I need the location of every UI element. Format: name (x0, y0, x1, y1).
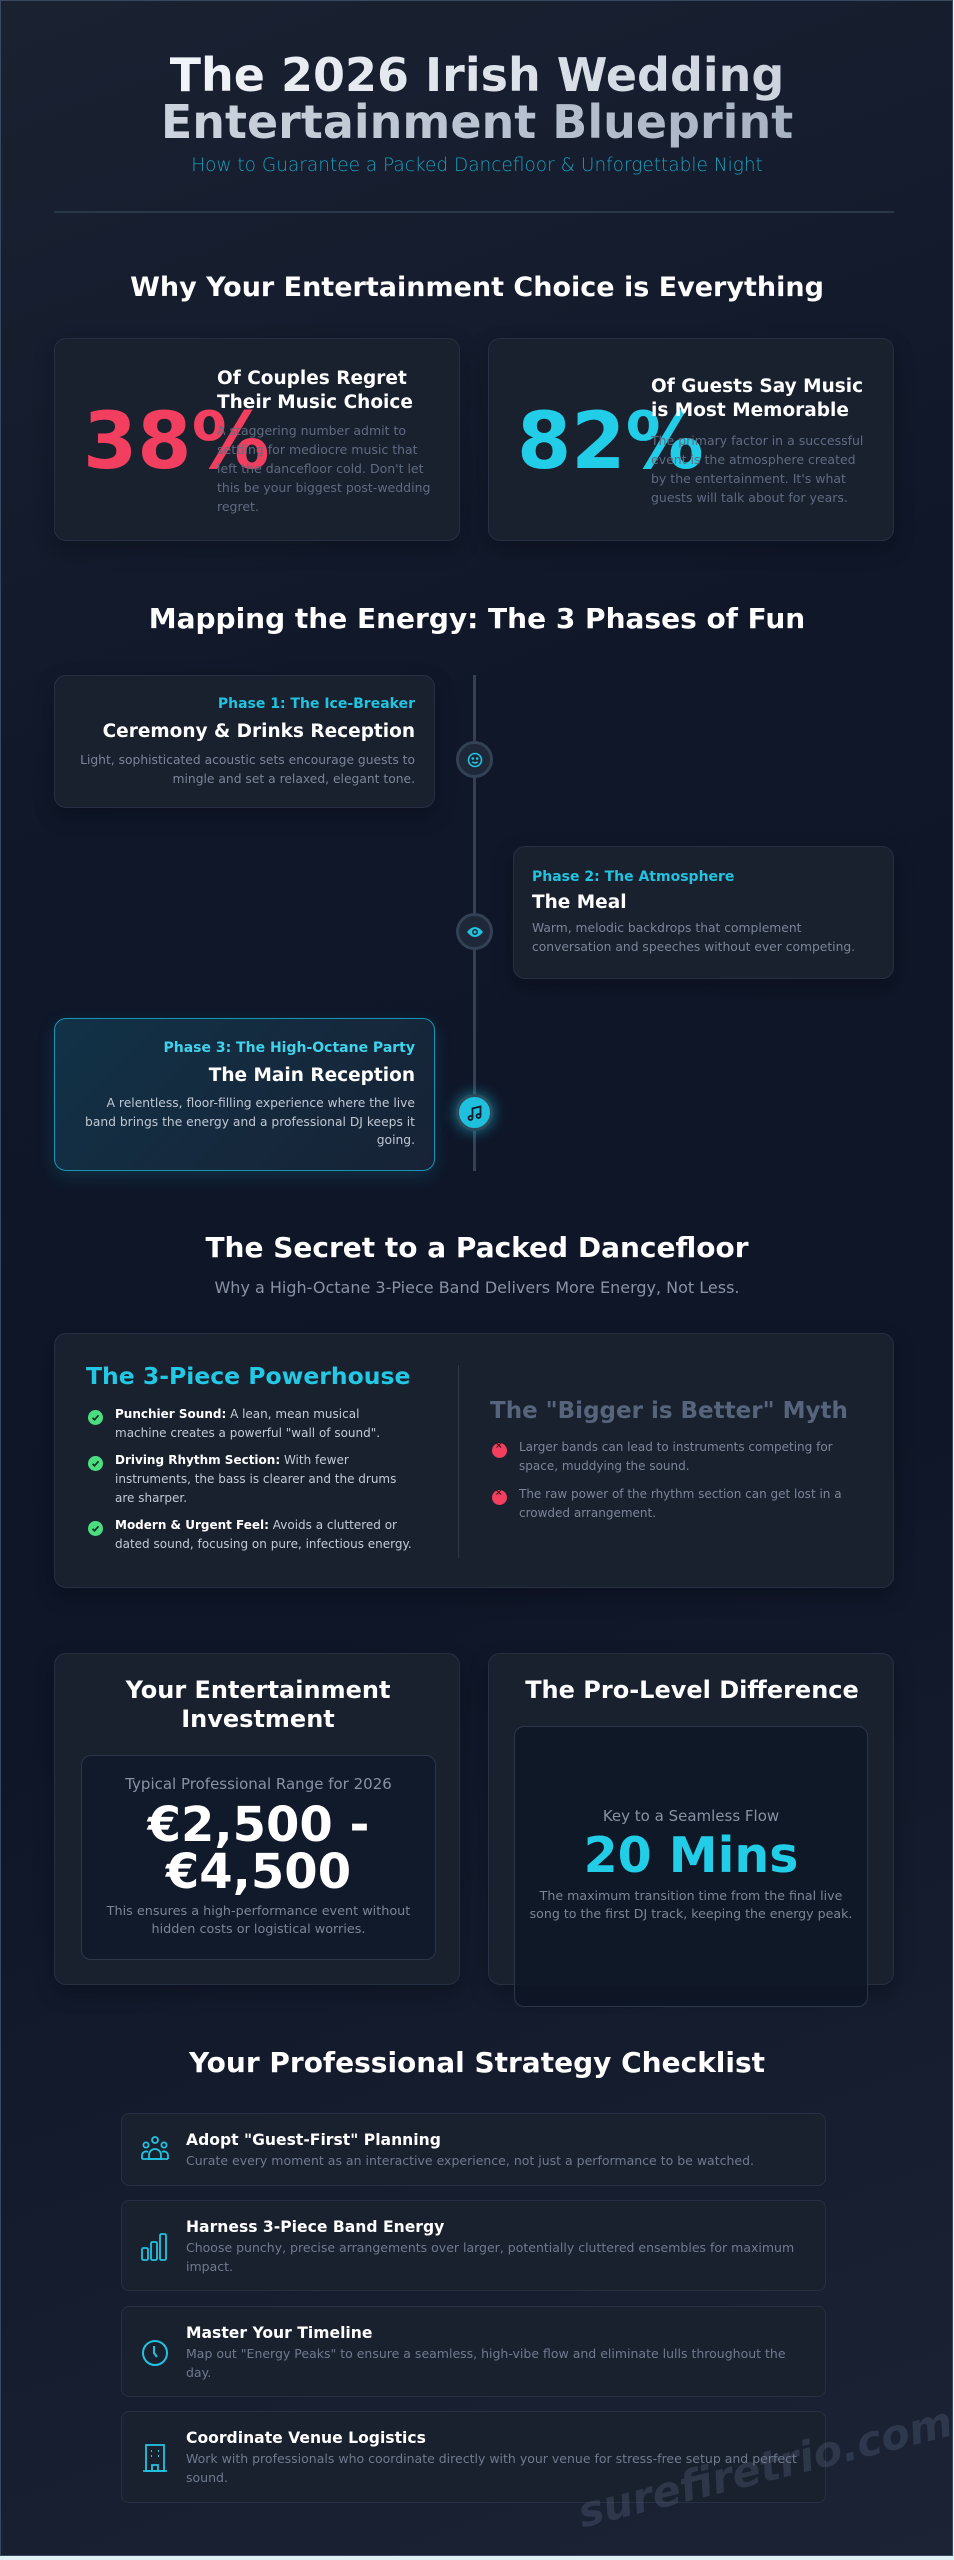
stat text: A staggering number admit to (217, 423, 406, 438)
panel: investment (54, 1653, 460, 1985)
stat card: 38% (54, 338, 460, 541)
phase 3 card: Phase 3: The High-Octane Party (163, 1040, 415, 1056)
x item 1: × (495, 1441, 503, 1451)
heading: mapping: Mapping the Energy: The 3 Phases of Fun (149, 602, 805, 635)
stat heading (217, 368, 413, 413)
powerhouse heading: The 3-Piece Powerhouse (86, 1362, 410, 1390)
checklist item 2: Choose punchy, precise arrangements over larger, potentially cluttered ensembles for maximum impact. (186, 2240, 794, 2274)
stat text: settling for mediocre music that (217, 442, 418, 457)
icon: music node (456, 1094, 493, 1131)
phase 3 card (54, 1018, 435, 1171)
check item 3: dated sound, focusing on pure, infectious energy. (115, 1537, 412, 1551)
phase 1 card: Ceremony & Drinks Reception (103, 721, 415, 742)
checklist item 3: Master Your Timeline (186, 2324, 372, 2342)
stat heading: is Most Memorable (651, 400, 849, 421)
heading: checklist: Your Professional Strategy Checklist (189, 2046, 765, 2079)
stat number: 38% (83, 397, 270, 487)
stat text: this be your biggest post-wedding (217, 480, 430, 495)
check item 2 (88, 1453, 396, 1505)
price (146, 1797, 369, 1900)
icon: bar chart (141, 2233, 167, 2261)
check item 1: Punchier Sound: A lean, mean musical (115, 1407, 359, 1421)
stat card: 82% (488, 338, 894, 541)
x item 2 (492, 1487, 842, 1520)
stat text (650, 433, 863, 505)
check item 1 (88, 1407, 380, 1440)
price: €2,500 - (148, 1797, 369, 1853)
checklist item 2: Harness 3-Piece Band Energy (186, 2218, 444, 2236)
phase 2 card: conversation and speeches without ever competing. (532, 940, 855, 954)
checklist item 1 (121, 2113, 826, 2186)
phase 3 card: going. (377, 1133, 415, 1147)
icon: smiley node (456, 741, 493, 778)
heading: why: Why Your Entertainment Choice is Everything (130, 272, 824, 303)
stat heading: Of Couples Regret (217, 368, 407, 389)
title: The 2026 Irish Wedding (170, 48, 784, 102)
check item 2: Driving Rhythm Section: With fewer (115, 1453, 349, 1467)
investment heading: Your Entertainment (126, 1676, 390, 1704)
icon: clock (142, 2340, 168, 2366)
icon: building (143, 2444, 167, 2472)
stat heading (651, 376, 863, 421)
stat text: regret. (217, 499, 259, 514)
phase 1 card: Phase 1: The Ice-Breaker (218, 696, 415, 712)
investment heading (125, 1676, 390, 1733)
stat heading: Their Music Choice (217, 392, 413, 413)
check item 1: machine creates a powerful "wall of sound". (115, 1426, 380, 1440)
heading: secret: The Secret to a Packed Dancefloor (205, 1231, 749, 1264)
panel: comparison (54, 1333, 894, 1588)
panel: pro-level (488, 1653, 894, 1985)
x item 2: The raw power of the rhythm section can get lost in a (519, 1487, 842, 1501)
price box: This ensures a high-performance event without (107, 1904, 410, 1919)
x item 1: Larger bands can lead to instruments competing for (519, 1440, 833, 1454)
title (161, 48, 793, 149)
x item 2: crowded arrangement. (519, 1506, 656, 1520)
icon: eye node (456, 913, 493, 950)
checklist item 1: Adopt "Guest-First" Planning (186, 2131, 441, 2149)
x item 2: × (495, 1488, 503, 1498)
phase 3 card: A relentless, floor-filling experience where the live (107, 1096, 415, 1110)
pro heading: The Pro-Level Difference (525, 1676, 859, 1704)
title: Entertainment Blueprint (161, 95, 793, 149)
check item 2: are sharper. (115, 1491, 187, 1505)
subtitle: How to Guarantee a Packed Dancefloor & Unforgettable Night (191, 155, 763, 176)
time box: The maximum transition time from the final live (540, 1888, 842, 1903)
stat text: The primary factor in a successful (651, 433, 863, 448)
stat text: event is the atmosphere created (651, 452, 856, 467)
timeline line (473, 675, 476, 1171)
phase 3 card: The Main Reception (209, 1065, 415, 1086)
price: €4,500 (166, 1844, 351, 1900)
check item 2: instruments, the bass is clearer and the drums (115, 1472, 396, 1486)
stat text: by the entertainment. It's what (651, 471, 846, 486)
check item 3 (88, 1518, 412, 1551)
time box: song to the first DJ track, keeping the energy peak. (530, 1906, 852, 1921)
phase 2 card: Phase 2: The Atmosphere (532, 869, 734, 885)
phase 1 card (54, 675, 435, 808)
stat text: left the dancefloor cold. Don't let (217, 461, 424, 476)
icon: users (141, 2136, 169, 2160)
stat number: 82% (517, 397, 704, 487)
checklist item 2 (121, 2200, 826, 2291)
checklist item 1: Curate every moment as an interactive experience, not just a performance to be watched. (186, 2153, 754, 2168)
price box: Typical Professional Range for 2026 (125, 1775, 392, 1793)
phase 1 card: Light, sophisticated acoustic sets encourage guests to (80, 753, 415, 767)
checklist item 3 (121, 2306, 826, 2397)
stat text: guests will talk about for years. (651, 490, 848, 505)
checklist item 4 (121, 2411, 826, 2503)
x item 1: space, muddying the sound. (519, 1459, 690, 1473)
phase 2 card (513, 846, 894, 979)
subheading: Why a High-Octane 3-Piece Band Delivers More Energy, Not Less. (214, 1278, 740, 1297)
checklist item 4: Work with professionals who coordinate directly with your venue for stress-free setup and perfect sound. (186, 2451, 797, 2485)
time box (514, 1726, 868, 2007)
20 mins: 20 Mins (584, 1827, 798, 1884)
check item 3: Modern & Urgent Feel: Avoids a cluttered or (115, 1518, 397, 1532)
x item 1 (492, 1440, 833, 1473)
phase 1 card: mingle and set a relaxed, elegant tone. (172, 772, 415, 786)
stat heading: Of Guests Say Music (651, 376, 863, 397)
watermark: surefiretrio.com (573, 2397, 953, 2537)
stat text (217, 423, 430, 514)
checklist item 4: Coordinate Venue Logistics (186, 2429, 426, 2447)
time box: Key to a Seamless Flow (603, 1807, 779, 1825)
myth heading: The "Bigger is Better" Myth (490, 1398, 848, 1424)
checklist item 3: Map out "Energy Peaks" to ensure a seamless, high-vibe flow and eliminate lulls throughout the day. (186, 2346, 786, 2380)
investment heading: Investment (181, 1705, 335, 1733)
phase 2 card: Warm, melodic backdrops that complement (532, 921, 801, 935)
price box: hidden costs or logistical worries. (152, 1922, 365, 1937)
phase 2 card: The Meal (532, 892, 627, 913)
price box (81, 1755, 436, 1960)
phase 3 card: band brings the energy and a professional DJ keeps it (85, 1114, 415, 1128)
